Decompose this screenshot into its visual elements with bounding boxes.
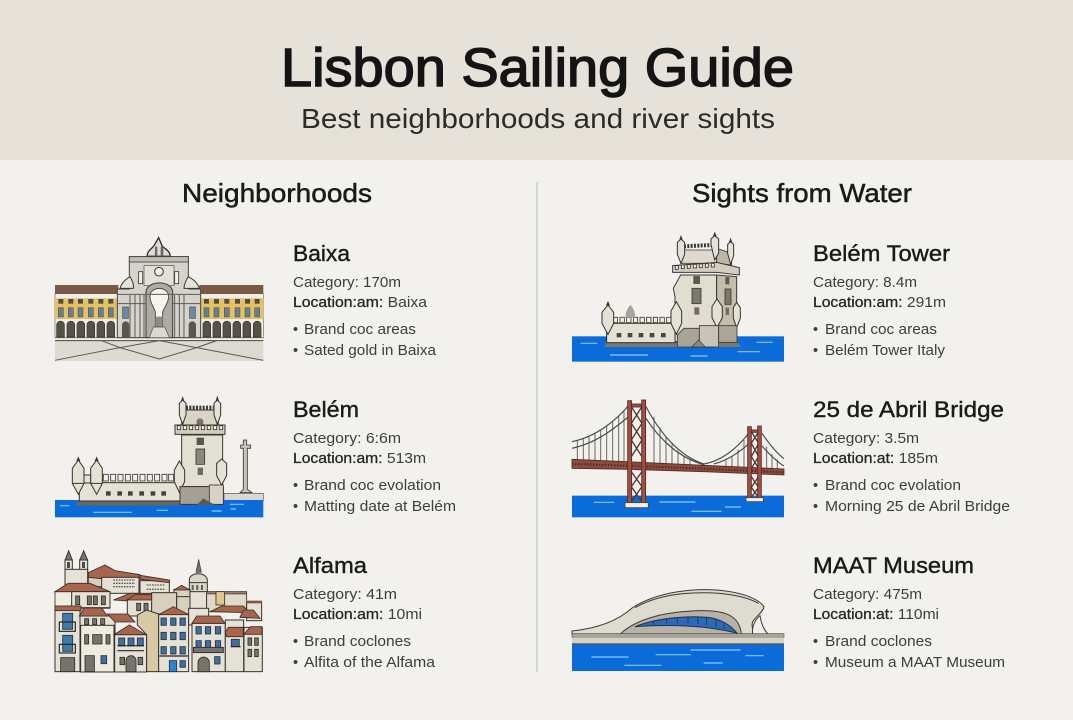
details: Sated gold in Baixa <box>304 343 437 359</box>
item: 25 de Abril Bridge <box>572 397 1010 517</box>
item: Belém Tower <box>572 232 951 362</box>
name: 25 de Abril Bridge <box>813 397 1004 422</box>
details: Location:am: 291m <box>813 295 946 311</box>
details: Category: 6:6m <box>293 431 401 447</box>
heading: neighborhoods: Neighborhoods <box>182 178 372 208</box>
details: Location:at: 110mi <box>813 607 939 623</box>
details: Brand coc evolation <box>304 478 441 494</box>
item: Alfama <box>55 551 436 672</box>
details: • <box>813 343 818 359</box>
panel: sights from water <box>572 178 1010 671</box>
name: Baixa <box>293 241 350 266</box>
details: Category: 475m <box>813 587 922 603</box>
illustration: Belém Tower <box>572 232 784 362</box>
details: Brand coc areas <box>304 322 416 338</box>
details <box>293 275 437 359</box>
name: MAAT Museum <box>813 553 974 578</box>
details: • <box>293 322 298 338</box>
details <box>293 431 456 515</box>
item: Baixa <box>55 238 437 361</box>
details: Morning 25 de Abril Bridge <box>825 499 1010 515</box>
details: Location:at: 185m <box>813 451 938 467</box>
panel: neighborhoods <box>55 178 456 672</box>
name: Alfama <box>293 553 368 578</box>
details: • <box>813 634 818 650</box>
details: Museum a MAAT Museum <box>825 655 1005 671</box>
details: Category: 3.5m <box>813 431 919 447</box>
details: • <box>813 499 818 515</box>
header band <box>0 0 1073 160</box>
illustration: Alfama hillside houses <box>55 551 262 672</box>
title: Lisbon Sailing Guide <box>281 38 794 98</box>
details: Category: 41m <box>293 587 397 603</box>
details: Brand coc evolation <box>825 478 961 494</box>
heading: sights from water: Sights from Water <box>692 178 912 208</box>
details: Brand coclones <box>825 634 932 650</box>
details: Location:am: Baixa <box>293 295 428 311</box>
details: • <box>813 655 818 671</box>
details: Belém Tower Italy <box>825 343 946 359</box>
details: Alfita of the Alfama <box>304 655 436 671</box>
details: Category: 8.4m <box>813 275 917 291</box>
details: • <box>813 478 818 494</box>
subtitle: Best neighborhoods and river sights <box>301 103 775 134</box>
item: Belém <box>55 395 456 517</box>
details: • <box>293 499 298 515</box>
details <box>813 431 1010 515</box>
details: Location:am: 513m <box>293 451 426 467</box>
details: Brand coclones <box>304 634 411 650</box>
details: • <box>293 655 298 671</box>
details: Matting date at Belém <box>304 499 456 515</box>
details: • <box>813 322 818 338</box>
details: • <box>293 634 298 650</box>
illustration: 25 de Abril Bridge <box>572 400 784 517</box>
details: • <box>293 343 298 359</box>
name: Belém <box>293 397 359 422</box>
details: • <box>293 478 298 494</box>
details <box>813 275 946 359</box>
name: Belém Tower <box>813 241 951 266</box>
illustration: Praça do Comércio arch <box>55 238 263 361</box>
item: MAAT Museum <box>572 553 1005 671</box>
details: Location:am: 10mi <box>293 607 422 623</box>
details: Brand coc areas <box>825 322 937 338</box>
details <box>293 587 436 671</box>
illustration: MAAT Museum <box>572 590 784 671</box>
illustration: Belém waterfront <box>55 395 263 517</box>
details <box>813 587 1005 671</box>
details: Category: 170m <box>293 275 401 291</box>
